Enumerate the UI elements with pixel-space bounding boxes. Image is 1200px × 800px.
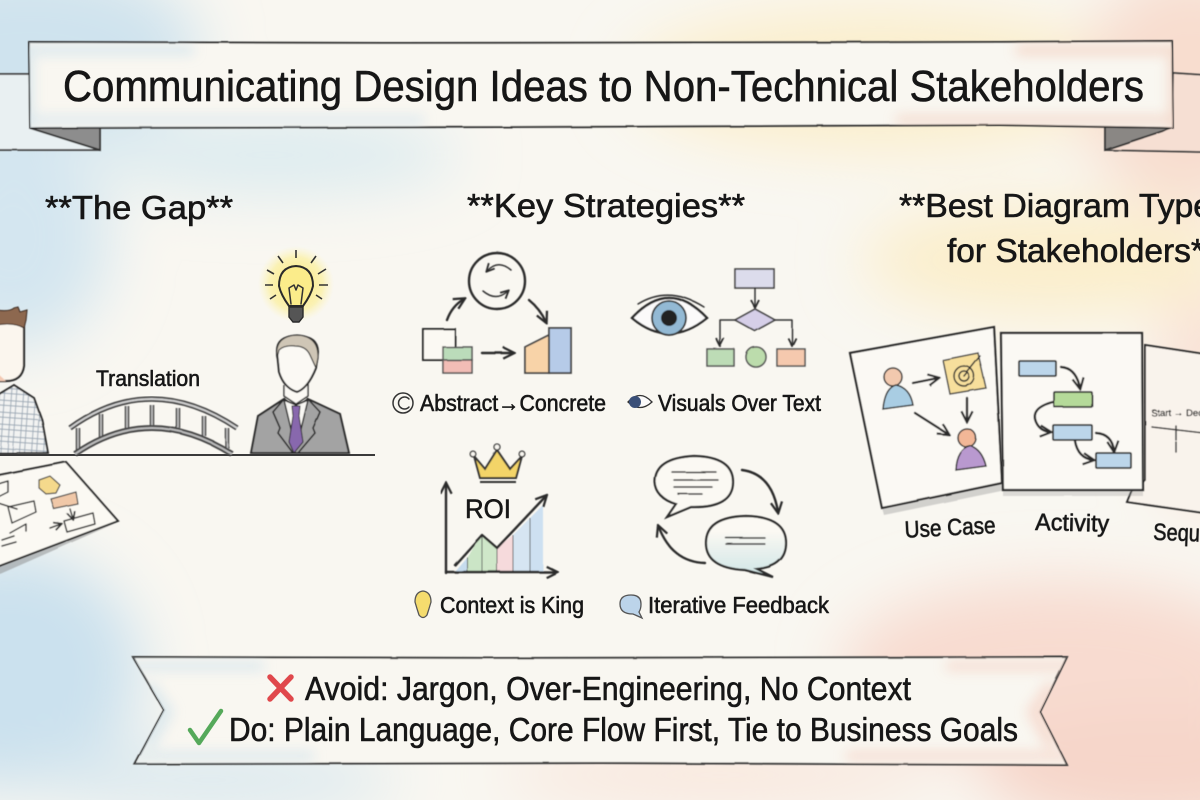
label: translation: Translation <box>96 366 200 391</box>
label: iterative feedback: Iterative Feedback <box>648 592 829 618</box>
banner shape <box>133 657 1067 765</box>
avoid text: Avoid: Jargon, Over-Engineering, No Context <box>305 670 911 707</box>
do text: Do: Plain Language, Core Flow First, Tie to Business Goals <box>229 711 1018 748</box>
icon: small bulb <box>415 591 431 618</box>
left fold <box>30 127 100 150</box>
label: abstract to concrete: Abstract→Concrete <box>420 390 606 416</box>
heading: the gap: **The Gap** <box>45 189 233 226</box>
left ribbon tail <box>0 74 100 150</box>
icon: abstract to concrete <box>423 253 571 373</box>
icon: lightbulb <box>258 246 334 322</box>
icon: small eye <box>628 396 652 408</box>
label: roi: ROI <box>465 494 511 524</box>
icon: red cross <box>270 677 291 699</box>
icon: swirl <box>393 393 413 413</box>
icon: translation bridge <box>70 399 237 454</box>
icon: diagram sheet <box>0 462 118 574</box>
strategy: iterative feedback <box>620 456 829 618</box>
panel: best diagram types <box>850 187 1200 549</box>
card: sequence <box>1127 345 1200 513</box>
ground line <box>0 454 375 456</box>
illustration: designer <box>0 307 48 453</box>
label: context is king: Context is King <box>440 592 584 618</box>
icon: crown and roi chart <box>446 444 556 573</box>
icon: green check <box>190 711 221 743</box>
heading: key strategies: **Key Strategies** <box>467 187 745 224</box>
panel: key strategies <box>393 187 829 618</box>
banner brush washes <box>20 50 1180 125</box>
banner brush washes <box>130 666 1070 756</box>
icon: eye and flowchart <box>632 269 805 367</box>
strategy: visuals over text <box>628 269 822 416</box>
card: activity <box>1001 333 1143 496</box>
title banner <box>0 41 1200 152</box>
label: visuals over text: Visuals Over Text <box>658 390 822 416</box>
illustration: stakeholder <box>251 335 349 453</box>
right ribbon tail <box>1105 73 1200 152</box>
label: activity: Activity <box>1035 509 1110 538</box>
card: use case <box>850 327 1006 515</box>
strategy: context is king <box>415 444 584 618</box>
panel: avoid and do banner <box>130 657 1070 765</box>
right fold <box>1105 127 1172 150</box>
panel: the gap <box>0 189 375 574</box>
banner body <box>29 41 1173 128</box>
icon: small bubble <box>620 595 642 618</box>
icon: speech bubbles <box>655 456 786 577</box>
strategy: abstract to concrete <box>393 253 606 416</box>
heading: best diagram types <box>899 187 1200 269</box>
label: use case: Use Case <box>904 512 996 544</box>
